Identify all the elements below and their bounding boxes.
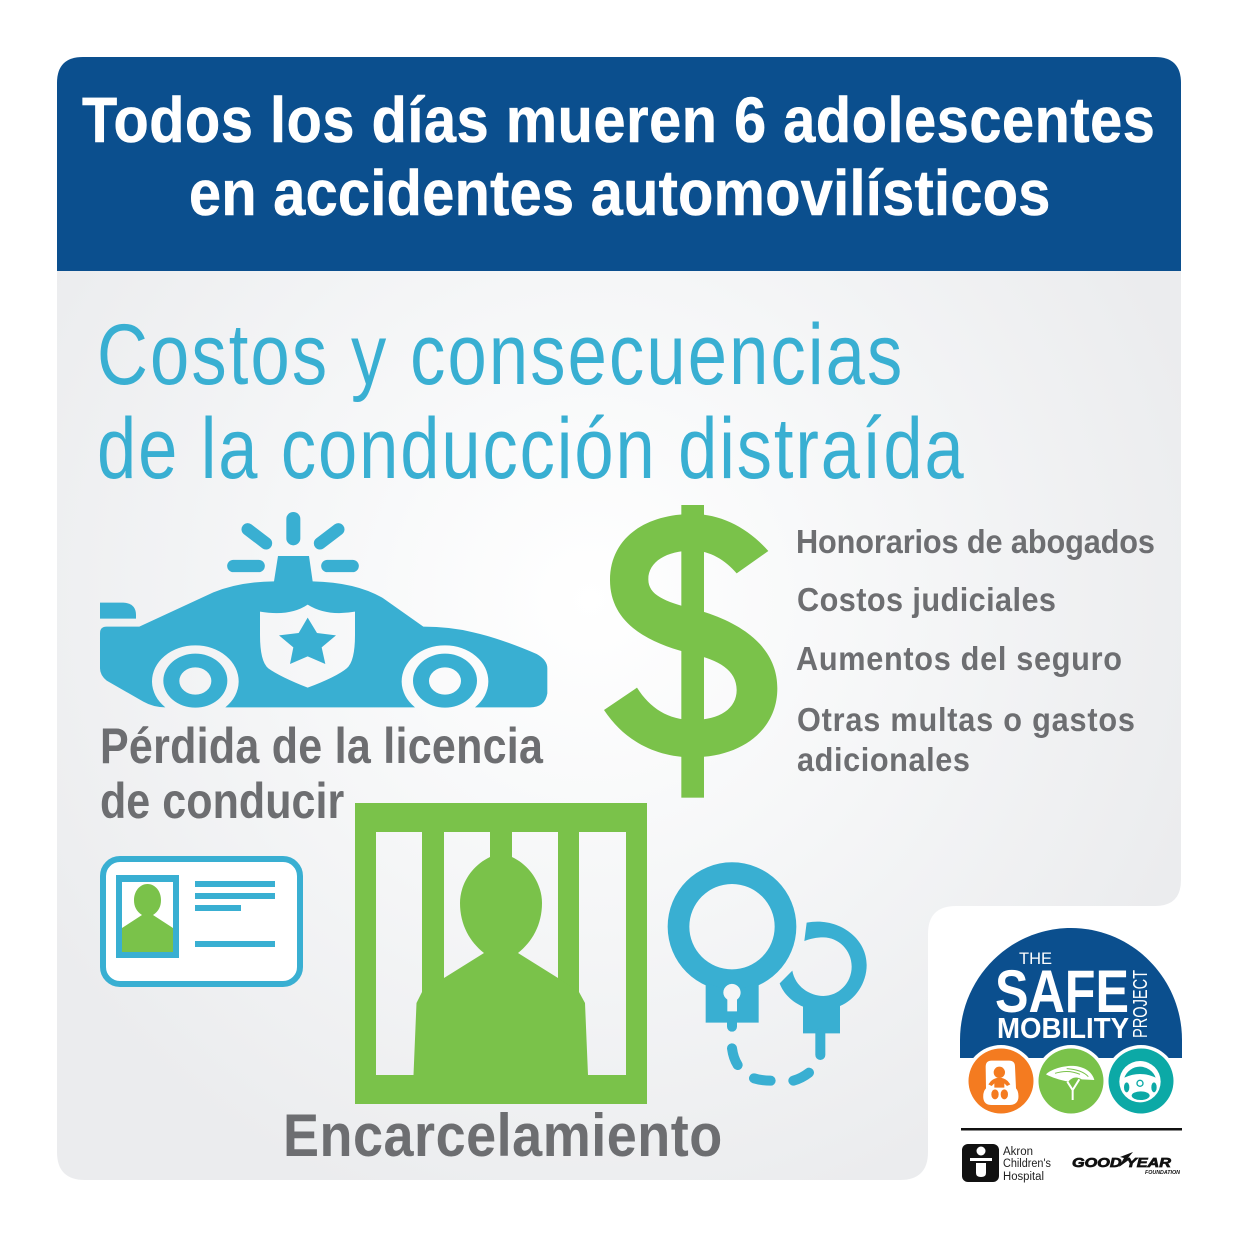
label: loss of license: de conducir (100, 773, 344, 829)
logo: Goodyear Foundation: GOOD YEAR (1072, 1155, 1172, 1170)
logo dome: MOBILITY (997, 1013, 1129, 1045)
panel: main background (57, 265, 1181, 1180)
logo dome (960, 928, 1182, 1058)
heading: costs and consequences: Costos y consecuencias (97, 306, 902, 403)
header banner: Todos los días mueren 6 adolescentes (82, 84, 1155, 156)
list: financial costs (796, 523, 1155, 778)
logo: Akron Children's Hospital (962, 1144, 1051, 1183)
list: financial costs: adicionales (797, 741, 970, 778)
logo: Goodyear Foundation (1072, 1152, 1181, 1176)
label: loss of license: Pérdida de la licencia (100, 718, 544, 774)
icon: police car (100, 519, 547, 708)
header banner (57, 57, 1181, 271)
logo dome: SAFE (995, 958, 1129, 1025)
logo: Akron Children's Hospital: Hospital (1003, 1171, 1044, 1183)
logo: Akron Children's Hospital: Akron (1003, 1146, 1033, 1158)
heading: costs and consequences (97, 306, 964, 497)
divider line (961, 1128, 1182, 1130)
list: financial costs: Honorarios de abogados (796, 523, 1155, 560)
list: financial costs: Aumentos del seguro (796, 640, 1122, 677)
icon: driver license card (103, 859, 300, 984)
label: incarceration: Encarcelamiento (283, 1102, 722, 1170)
icon: person behind bars (355, 803, 647, 1104)
icon: steering wheel (1105, 1045, 1177, 1117)
list: financial costs: Costos judiciales (797, 581, 1056, 618)
icon: child seat (965, 1045, 1037, 1117)
logo: The Safe Mobility Project (960, 928, 1182, 1183)
icon: handcuffs (668, 862, 867, 1081)
heading: costs and consequences: de la conducción distraída (97, 400, 964, 497)
label: loss of license (100, 718, 544, 829)
list: financial costs: Otras multas o gastos (797, 701, 1135, 738)
header banner: en accidentes automovilísticos (189, 157, 1050, 229)
icon: dollar sign (604, 505, 777, 798)
icon: bicycle helmet (1035, 1045, 1107, 1117)
logo dome: THE (1019, 949, 1052, 968)
logo dome: PROJECT (1130, 970, 1152, 1038)
logo: Akron Children's Hospital: Children's (1003, 1158, 1051, 1170)
logo: Goodyear Foundation: FOUNDATION (1145, 1170, 1181, 1176)
